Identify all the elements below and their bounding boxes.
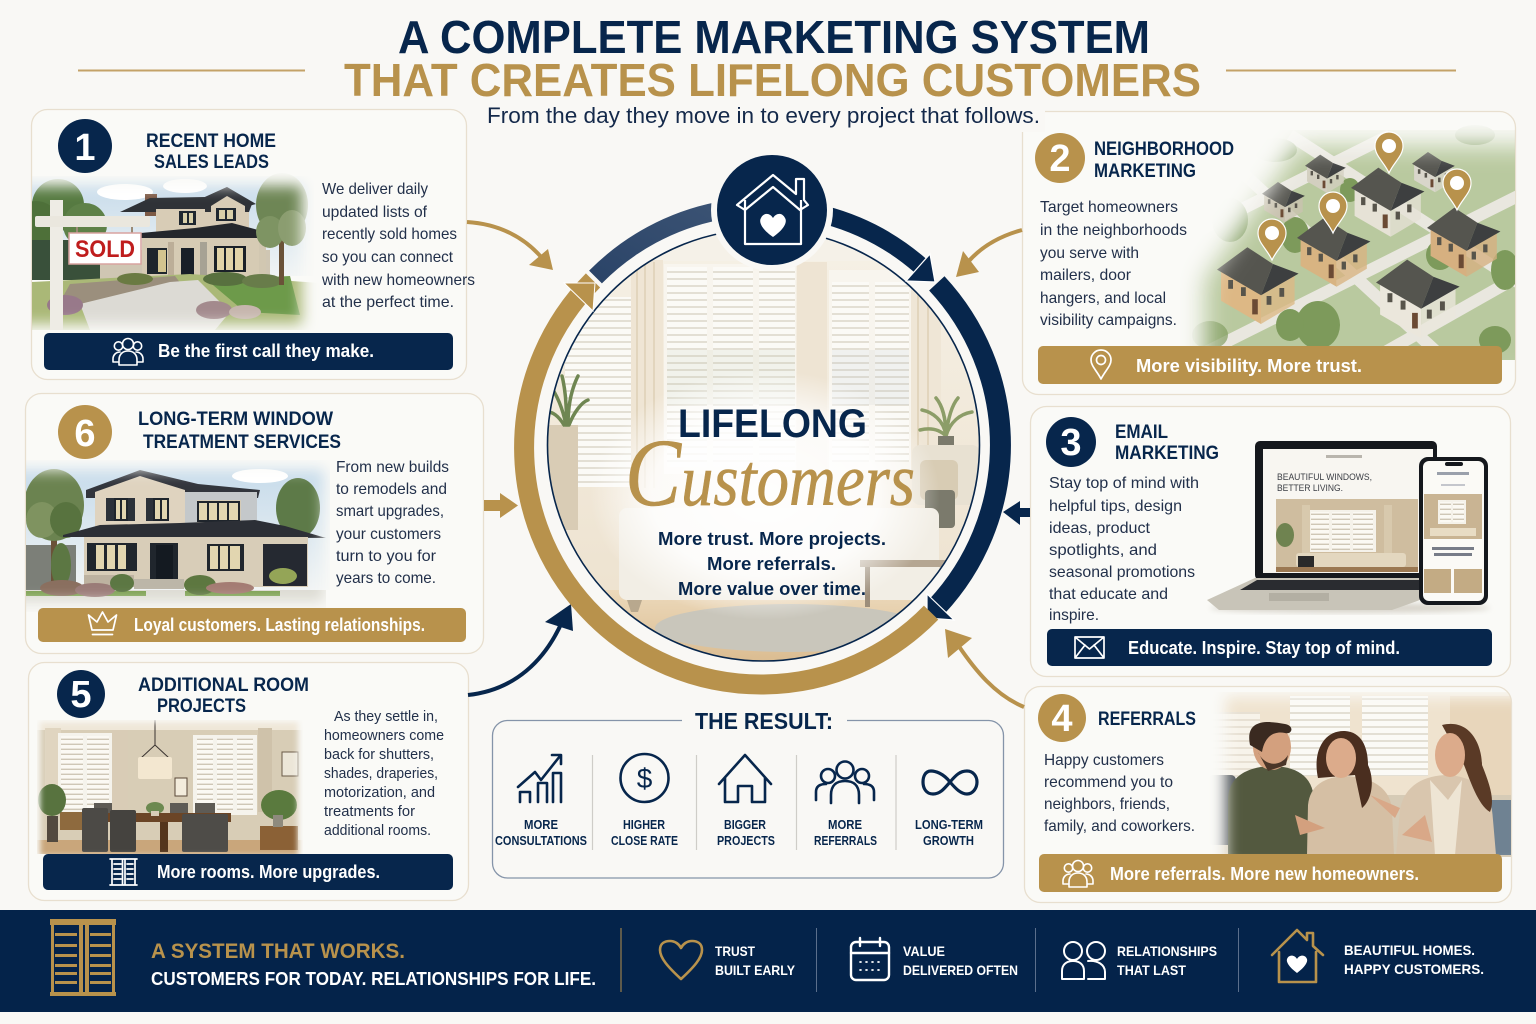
heading 3 xyxy=(1115,422,1219,464)
ring: top-right navy arc with arrow xyxy=(825,215,935,282)
body text 6: to remodels and xyxy=(336,481,447,498)
number badge 3: 3 xyxy=(1060,422,1082,464)
heading 2: NEIGHBORHOOD xyxy=(1094,139,1234,160)
ring: gold arc with arrow xyxy=(524,280,931,684)
icon: crown xyxy=(88,612,116,634)
footer item: beautiful homes xyxy=(1272,930,1484,982)
footer headline: CUSTOMERS FOR TODAY. RELATIONSHIPS FOR LIFE. xyxy=(151,969,596,989)
body text 5: back for shutters, xyxy=(324,747,434,763)
heading 6: TREATMENT SERVICES xyxy=(143,432,341,453)
photo: sold home with sign: SOLD xyxy=(75,236,135,263)
body text 1: with new homeowners xyxy=(321,272,475,289)
ring: top-left navy arc xyxy=(596,211,718,277)
body text 3: ideas, product xyxy=(1049,520,1151,537)
number badge 1 xyxy=(58,119,112,173)
callout bar 4 xyxy=(1039,854,1502,892)
body text 4: Happy customers xyxy=(1044,752,1164,769)
heading 3: MARKETING xyxy=(1115,443,1219,464)
footer item: relationships that last: RELATIONSHIPS xyxy=(1117,943,1217,959)
number badge 4: 4 xyxy=(1051,698,1073,740)
body text 3: inspire. xyxy=(1049,607,1099,624)
heading 5: PROJECTS xyxy=(157,696,246,717)
result: higher close rate: $ xyxy=(637,763,653,794)
body text 4: family, and coworkers. xyxy=(1044,818,1195,835)
heading 5 xyxy=(138,675,309,717)
central hub: lifelong customers xyxy=(524,149,1000,684)
icon: house with heart xyxy=(737,175,808,244)
panel 5: additional room projects xyxy=(28,662,468,900)
subtitle: From the day they move in to every project that follows. xyxy=(487,103,1040,128)
illustration: laptop and phone showing email: BEAUTIFUL WINDOWS, xyxy=(1277,472,1372,482)
result: more consultations xyxy=(495,755,587,848)
panel 2: neighborhood marketing xyxy=(1022,112,1530,394)
panel 4: referrals xyxy=(1024,686,1520,902)
number badge 4 xyxy=(1038,694,1086,742)
body text 6 xyxy=(336,459,449,587)
body text 4 xyxy=(1044,752,1195,835)
heading 4: REFERRALS xyxy=(1098,709,1196,730)
callout bar 6: Loyal customers. Lasting relationships. xyxy=(134,615,425,635)
icon: map pin xyxy=(1091,350,1111,379)
number badge 5: 5 xyxy=(70,674,92,716)
body text 5: As they settle in, xyxy=(334,709,438,725)
panel 3: email marketing xyxy=(1030,406,1510,676)
body text 6: turn to you for xyxy=(336,548,437,565)
photo: three people on a sofa xyxy=(1205,692,1520,857)
body text 2: hangers, and local xyxy=(1040,290,1166,307)
illustration: laptop and phone showing email: BETTER LIVING. xyxy=(1277,483,1343,493)
arrow: step 1 to hub xyxy=(467,222,553,270)
body text 5: motorization, and xyxy=(324,785,435,801)
house badge xyxy=(711,149,833,271)
callout bar 1: Be the first call they make. xyxy=(158,341,374,361)
result: higher close rate xyxy=(611,754,678,848)
result: long-term growth: GROWTH xyxy=(923,834,974,848)
result: more referrals: MORE xyxy=(828,818,862,832)
heading 6: LONG-TERM WINDOW xyxy=(138,409,333,430)
footer item: value delivered often: DELIVERED OFTEN xyxy=(903,962,1018,978)
body text 3: Stay top of mind with xyxy=(1049,475,1199,492)
arrow: step 3 to hub xyxy=(1003,501,1030,525)
number badge 3 xyxy=(1046,417,1096,467)
result: more consultations: MORE xyxy=(524,818,558,832)
result: higher close rate: HIGHER xyxy=(623,818,665,832)
result: more consultations: CONSULTATIONS xyxy=(495,834,587,848)
hub text: More value over time. xyxy=(678,578,866,599)
photo: dining room with shutters xyxy=(37,720,303,854)
body text 5 xyxy=(324,709,444,839)
icon: gold shutters xyxy=(50,919,116,996)
callout bar 1 xyxy=(44,333,453,370)
hub text: More trust. More projects. xyxy=(658,528,886,549)
heading 2 xyxy=(1094,139,1234,182)
hub heading: customers: Customers xyxy=(625,419,915,526)
hub text: More referrals. xyxy=(707,553,836,574)
icon: envelope xyxy=(1075,637,1104,658)
arrow: step 5 to hub xyxy=(468,604,573,695)
callout bar 2: More visibility. More trust. xyxy=(1136,356,1362,376)
result: bigger projects xyxy=(717,755,775,848)
panel 6: long-term window treatment services xyxy=(20,394,484,654)
panel 1: recent home sales leads xyxy=(12,110,475,380)
result: more referrals: REFERRALS xyxy=(814,834,877,848)
body text 1: We deliver daily xyxy=(322,181,428,198)
body text 3: spotlights, and xyxy=(1049,542,1157,559)
footer item: relationships that last: THAT LAST xyxy=(1117,962,1186,978)
heading 2: MARKETING xyxy=(1094,161,1196,182)
callout bar 3 xyxy=(1047,629,1492,666)
body text 1: at the perfect time. xyxy=(322,294,454,311)
body text 4: recommend you to xyxy=(1044,774,1173,791)
illustration: aerial neighborhood with pins xyxy=(1180,125,1530,360)
result: higher close rate: CLOSE RATE xyxy=(611,834,678,848)
heading: the result: THE RESULT: xyxy=(695,708,833,734)
body text 3 xyxy=(1049,475,1199,624)
arrow: step 6 to hub xyxy=(484,493,518,518)
number badge 5 xyxy=(57,670,105,718)
callout bar 3: Educate. Inspire. Stay top of mind. xyxy=(1128,638,1400,658)
body text 5: shades, draperies, xyxy=(324,766,438,782)
result: bigger projects: PROJECTS xyxy=(717,834,775,848)
footer item: relationships that last xyxy=(1062,942,1217,979)
footer item: trust built early: BUILT EARLY xyxy=(715,962,796,978)
footer headline: A SYSTEM THAT WORKS. xyxy=(151,940,405,963)
panel: the result xyxy=(492,708,1004,878)
callout bar 2 xyxy=(1038,346,1502,384)
footer item: trust built early xyxy=(660,941,796,979)
body text 6: smart upgrades, xyxy=(336,503,444,520)
body text 2: Target homeowners xyxy=(1040,199,1178,216)
body text 4: neighbors, friends, xyxy=(1044,796,1170,813)
result: long-term growth xyxy=(915,771,983,848)
photo: finished home exterior xyxy=(20,460,330,612)
body text 3: that educate and xyxy=(1049,586,1168,603)
body text 1: updated lists of xyxy=(322,204,428,221)
footer item: value delivered often: VALUE xyxy=(903,943,945,959)
hub heading: lifelong: LIFELONG xyxy=(678,402,867,446)
number badge 1: 1 xyxy=(74,127,96,169)
heading 6 xyxy=(138,409,341,453)
heading 1 xyxy=(146,131,276,173)
callout bar 5: More rooms. More upgrades. xyxy=(157,862,380,882)
callout bar 6 xyxy=(38,608,466,642)
body text 1: so you can connect xyxy=(322,249,454,266)
number badge 6: 6 xyxy=(74,413,96,455)
ring: right navy arc with arrow xyxy=(927,283,1000,620)
photo: sold home with sign xyxy=(32,175,312,330)
body text 3: seasonal promotions xyxy=(1049,564,1195,581)
result: more referrals xyxy=(814,762,877,848)
callout bar 4: More referrals. More new homeowners. xyxy=(1110,864,1419,884)
title: THAT CREATES LIFELONG CUSTOMERS xyxy=(344,54,1201,106)
number badge 2 xyxy=(1035,133,1085,183)
footer headline xyxy=(151,940,596,989)
callout bar 5 xyxy=(43,854,453,890)
result: bigger projects: BIGGER xyxy=(724,818,766,832)
body text 6: years to come. xyxy=(336,570,436,587)
body text 5: additional rooms. xyxy=(324,823,431,839)
body text 2 xyxy=(1040,199,1187,329)
heading 1: SALES LEADS xyxy=(154,152,269,173)
title xyxy=(78,11,1456,106)
number badge 2: 2 xyxy=(1049,138,1071,180)
body text 5: treatments for xyxy=(324,804,415,820)
body text 6: your customers xyxy=(336,526,441,543)
footer band xyxy=(0,910,1536,1012)
arrow: step 4 to hub xyxy=(945,629,1024,707)
body text 2: you serve with xyxy=(1040,245,1139,262)
heading 3: EMAIL xyxy=(1115,422,1168,443)
body text 3: helpful tips, design xyxy=(1049,498,1182,515)
arrow: step 2 to hub xyxy=(956,230,1022,277)
body text 5: homeowners come xyxy=(324,728,444,744)
body text 2: mailers, door xyxy=(1040,267,1132,284)
body text 1 xyxy=(321,181,475,311)
hub photo: living room with shutters xyxy=(540,225,990,670)
illustration: laptop and phone showing email xyxy=(1207,441,1490,613)
hub text xyxy=(658,528,886,599)
body text 2: visibility campaigns. xyxy=(1040,312,1177,329)
footer item: trust built early: TRUST xyxy=(715,943,755,959)
footer item: beautiful homes: HAPPY CUSTOMERS. xyxy=(1344,961,1484,977)
heading 1: RECENT HOME xyxy=(146,131,276,152)
body text 1: recently sold homes xyxy=(322,226,457,243)
title: A COMPLETE MARKETING SYSTEM xyxy=(398,11,1150,63)
body text 2: in the neighborhoods xyxy=(1040,222,1187,239)
number badge 6 xyxy=(58,405,112,459)
heading 5: ADDITIONAL ROOM xyxy=(138,675,309,696)
body text 6: From new builds xyxy=(336,459,449,476)
result: long-term growth: LONG-TERM xyxy=(915,818,983,832)
footer item: beautiful homes: BEAUTIFUL HOMES. xyxy=(1344,942,1475,958)
icon: shutters xyxy=(110,859,137,885)
footer item: value delivered often xyxy=(851,938,1018,980)
